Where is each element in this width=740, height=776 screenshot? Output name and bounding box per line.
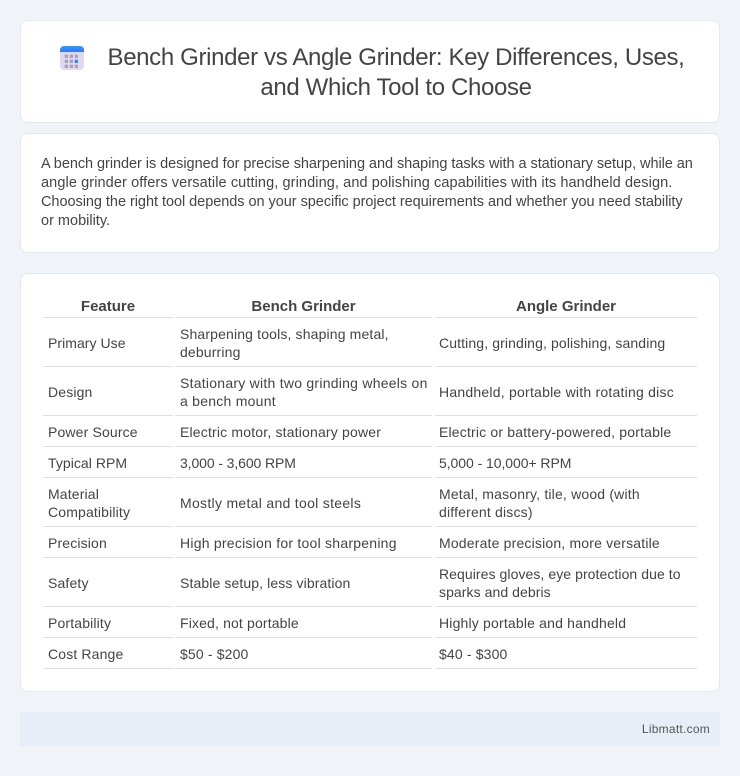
text: Precision [48, 535, 107, 551]
text: Stationary with two grinding wheels on [180, 375, 428, 391]
text: sparks and debris [439, 584, 551, 600]
table header: Feature: Feature [81, 298, 135, 315]
text: 3,000 - 3,600 RPM [180, 455, 296, 471]
text: Typical RPM [48, 455, 127, 471]
text: a bench mount [180, 393, 276, 409]
row: Design [48, 375, 674, 409]
text: Design [48, 384, 92, 400]
text: Compatibility [48, 504, 130, 520]
text block: introduction: or mobility. [41, 213, 110, 229]
text: Stable setup, less vibration [180, 575, 350, 591]
text: Requires gloves, eye protection due to [439, 566, 681, 582]
comparison table [43, 298, 697, 669]
text: Electric motor, stationary power [180, 424, 381, 440]
row: Portability [48, 615, 626, 631]
row: Precision [48, 535, 660, 551]
text: Handheld, portable with rotating disc [439, 384, 674, 400]
text: $50 - $200 [180, 646, 248, 662]
footer: source credit: Libmatt.com [642, 722, 710, 736]
heading: title: Bench Grinder vs Angle Grinder: Key Differences, Uses, [108, 44, 684, 71]
text: Moderate precision, more versatile [439, 535, 660, 551]
text: Highly portable and handheld [439, 615, 626, 631]
row: Material Compatibility [48, 486, 640, 520]
text: Safety [48, 575, 89, 591]
row: Primary Use [48, 326, 665, 360]
text block: introduction: Choosing the right tool depends on your specific project requirements and whether you need stability [41, 194, 683, 210]
panel: comparison table card [20, 273, 720, 692]
text: Fixed, not portable [180, 615, 299, 631]
text: Primary Use [48, 335, 126, 351]
row: Safety [48, 566, 681, 600]
icon: calendar [60, 46, 84, 70]
text: $40 - $300 [439, 646, 507, 662]
text: Cost Range [48, 646, 123, 662]
text: High precision for tool sharpening [180, 535, 397, 551]
heading: title [108, 44, 684, 101]
text: Electric or battery-powered, portable [439, 424, 671, 440]
panel: introduction card [20, 133, 720, 253]
text: Portability [48, 615, 111, 631]
table header: Angle Grinder: Angle Grinder [516, 298, 616, 315]
text: Material [48, 486, 99, 502]
text: Sharpening tools, shaping metal, [180, 326, 389, 342]
text: deburring [180, 344, 241, 360]
text: 5,000 - 10,000+ RPM [439, 455, 571, 471]
text: different discs) [439, 504, 533, 520]
text block: introduction: A bench grinder is designed for precise sharpening and shaping tasks with a stationary setup, while an [41, 156, 693, 172]
text block: introduction: angle grinder offers versatile cutting, grinding, and polishing capabilities with its handheld design. [41, 175, 672, 191]
panel: title card [20, 20, 720, 123]
heading: title: and Which Tool to Choose [260, 74, 532, 101]
row: Power Source [48, 424, 671, 440]
text: Power Source [48, 424, 138, 440]
table header: Bench Grinder: Bench Grinder [251, 298, 356, 315]
text: Metal, masonry, tile, wood (with [439, 486, 640, 502]
text block: introduction [41, 156, 693, 229]
text: Mostly metal and tool steels [180, 495, 361, 511]
footer bar [20, 712, 720, 746]
text: Cutting, grinding, polishing, sanding [439, 335, 665, 351]
row: Cost Range [48, 646, 507, 662]
row: Typical RPM [48, 455, 571, 471]
